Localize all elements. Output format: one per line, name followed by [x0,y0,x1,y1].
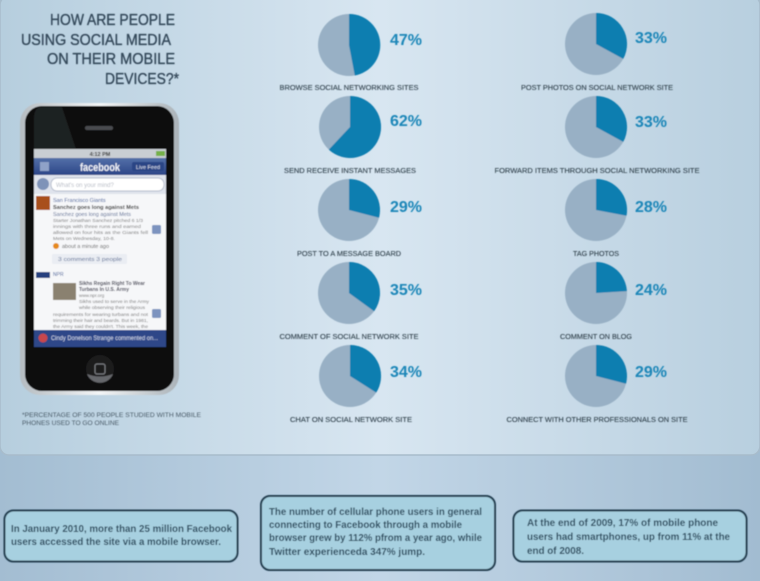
callout: cellular users connecting to Facebook: browser grew by 112% pfrom a year ago, while [269,533,482,544]
phone screen: facebook [80,162,121,174]
pie: chat on social network site 34% [290,345,422,424]
pie: browse social networking sites 47%: 47% [390,32,422,49]
pie: post photos on social network site 33% [521,13,673,92]
phone screen: NPR [53,272,64,278]
callout: smartphone share: At the end of 2009, 17% of mobile phone [527,518,718,529]
phone screen: about a minute ago [62,244,109,250]
callout: cellular users connecting to Facebook [261,496,495,570]
title: HOW ARE PEOPLE [50,12,175,29]
phone screen: Live Feed [136,165,160,171]
pie: chat on social network site 34%: CHAT ON SOCIAL NETWORK SITE [290,415,412,424]
callout: smartphone share [514,510,746,562]
title: DEVICES?* [105,71,179,88]
pie: send receive instant messages 62%: SEND RECEIVE INSTANT MESSAGES [284,166,416,175]
phone screen: 3 comments 3 people [58,257,122,263]
phone screen: while observing their religious [79,305,146,310]
phone screen: trimming their hair and beards. But in 1981, [53,318,148,323]
pie: comment on blog 24%: COMMENT ON BLOG [560,332,632,341]
callout: Facebook mobile browser users: In January 2010, more than 25 million Facebook [11,524,232,535]
footnote: *PERCENTAGE OF 500 PEOPLE STUDIED WITH MOBILE [22,412,201,419]
pie: post photos on social network site 33%: 33% [635,30,667,47]
title: ON THEIR MOBILE [47,51,175,68]
phone screen: Sikhs Regain Right To Wear [79,281,145,287]
pie: chat on social network site 34%: 34% [390,364,422,381]
callout: smartphone share: users had smartphones, up from 11% at the [527,532,730,543]
pie: browse social networking sites 47%: BROWSE SOCIAL NETWORKING SITES [280,83,418,92]
pie: connect with other professionals on site 29% [506,345,688,424]
pie: comment of social network site 35% [280,262,422,341]
pie: comment of social network site 35%: COMMENT OF SOCIAL NETWORK SITE [280,332,418,341]
pie: post to a message board 29% [297,179,422,258]
callout: cellular users connecting to Facebook: The number of cellular phone users in general [269,507,482,518]
icon: smartphone showing Facebook [20,103,179,395]
pie: tag photos 28%: 28% [635,199,667,216]
pie: connect with other professionals on site 29%: 29% [635,364,667,381]
phone screen: Turbans In U.S. Army [79,287,129,293]
callout: cellular users connecting to Facebook: connecting to Facebook through a mobile [269,520,462,531]
pie: post photos on social network site 33%: POST PHOTOS ON SOCIAL NETWORK SITE [521,83,673,92]
phone screen: Mets on Wednesday, 10-8. [53,236,115,241]
phone home button [86,355,114,383]
callout: Facebook mobile browser users: users accessed the site via a mobile browser. [11,537,221,548]
phone screen: allowed on four hits as the Giants fell [53,230,148,235]
pie: browse social networking sites 47% [280,14,422,92]
title: USING SOCIAL MEDIA [21,32,171,49]
pie: send receive instant messages 62% [284,96,422,175]
footnote: PHONES USED TO GO ONLINE [22,420,119,427]
pie: comment on blog 24%: 24% [635,282,667,299]
phone screen: requirements for wearing turbans and not [53,312,149,317]
footnote [22,412,201,427]
pie: send receive instant messages 62%: 62% [390,113,422,130]
pie: forward items through social networking site 33%: FORWARD ITEMS THROUGH SOCIAL NETWORKING SITE [494,166,700,175]
panel: survey results [0,0,760,455]
pie: comment of social network site 35%: 35% [390,282,422,299]
phone screen: San Francisco Giants [53,198,106,204]
phone screen: 4:12 PM [90,152,111,158]
phone screen: Starter Jonathan Sanchez pitched 6 1/3 [53,218,143,223]
pie: forward items through social networking site 33% [494,96,700,175]
phone screen [34,149,166,347]
pie: forward items through social networking site 33%: 33% [635,114,667,131]
callout: Facebook mobile browser users [4,510,238,562]
pie: connect with other professionals on site 29%: CONNECT WITH OTHER PROFESSIONALS ON SITE [506,415,688,424]
phone screen: www.npr.org [79,293,105,298]
phone screen: Sanchez goes long against Mets [53,205,139,211]
phone screen: Cindy Donelson Strange commented on... [51,336,158,342]
phone screen: What's on your mind? [56,183,115,189]
phone screen: the Army said they couldn't. This week, the [53,324,148,329]
callout: smartphone share: end of 2008. [527,546,584,557]
callout: cellular users connecting to Facebook: Twitter experienceda 347% jump. [269,547,425,558]
pie: post to a message board 29%: 29% [390,199,422,216]
phone screen: innings with three runs and earned [53,224,142,229]
phone screen: Sikhs used to serve in the Army [79,299,150,304]
pie: post to a message board 29%: POST TO A MESSAGE BOARD [297,249,402,258]
phone screen: Sanchez goes long against Mets [53,212,132,218]
pie: comment on blog 24% [560,262,667,341]
pie: tag photos 28% [565,179,667,258]
pie: tag photos 28%: TAG PHOTOS [573,249,619,258]
title [21,12,179,88]
